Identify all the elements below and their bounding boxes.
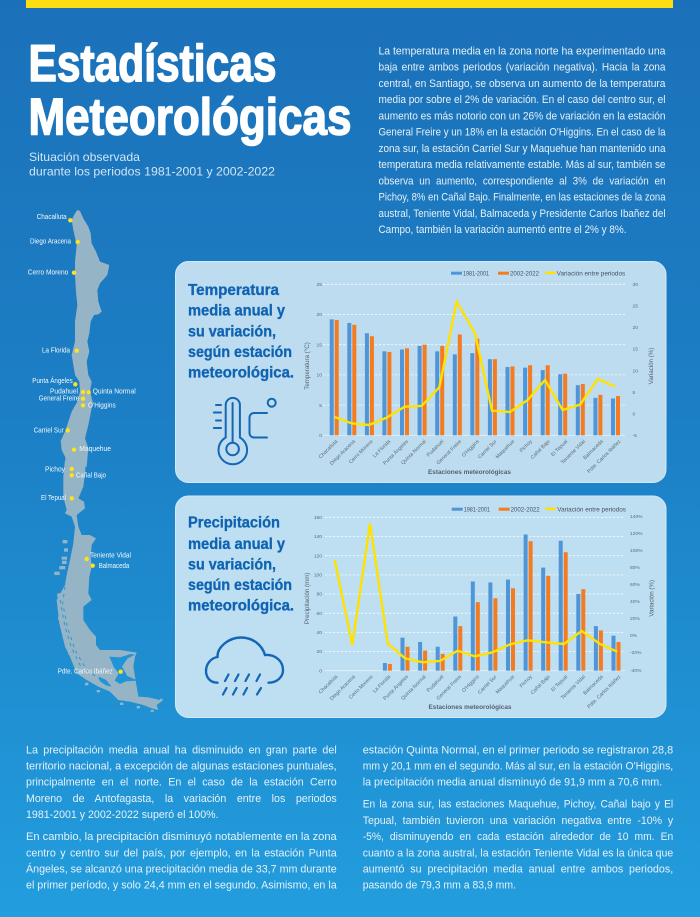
heading: temperature: [188, 282, 294, 381]
heading: precipitation: Precipitación: [188, 515, 280, 532]
bar and line chart: temperature: 5: [319, 403, 322, 409]
text block: precipitation left column: el primer período, y solo 24,4 mm en el segundo. Asimismo, en la: [26, 880, 337, 892]
bar and line chart: precipitation: 160: [314, 515, 322, 521]
bar and line chart: precipitation: Pichoy: [519, 674, 534, 689]
bar and line chart: precipitation: 40%: [630, 599, 640, 605]
text block: precipitation left column: En cambio, la precipitación disminuyó notablemente en la zona: [26, 831, 337, 843]
bar and line chart: temperature: 10: [317, 373, 322, 379]
bar and line chart: temperature: Balmaceda: [582, 439, 605, 461]
text block: precipitation right column: -5%, disminuyendo en cada estación alrededor de 10 mm. En: [363, 831, 673, 843]
text block: temperature summary: observa un aumento, correspondiente al 3% de variación en: [378, 175, 666, 187]
legend: temperature chart: 1981-2001: [463, 271, 490, 277]
heading: temperature: Temperatura: [188, 282, 279, 299]
heading: precipitation: según estación: [188, 577, 292, 594]
legend: precipitation chart: Variación entre periodos: [557, 507, 626, 513]
bar and line chart: temperature: 30: [632, 282, 638, 288]
text block: precipitation left column: 1981-2001 y 2002-2022 superó el 100%.: [26, 809, 218, 821]
text block: temperature summary: austral, Teniente Vidal, Balmaceda y Presidente Carlos Ibañez del: [378, 208, 666, 220]
map of Chile with stations: Maquehue: [79, 444, 111, 453]
text block: precipitation left column: centro y centro sur del país, por ejemplo, en la estación Punta: [26, 847, 337, 859]
bar and line chart: precipitation: Precipitación (mm): [304, 573, 311, 624]
icon: thermometer: [214, 398, 276, 464]
text block: temperature summary: La temperatura media en la zona norte ha experimentado una: [378, 45, 666, 57]
bar and line chart: temperature: General Freire: [436, 439, 463, 466]
map of Chile with stations: Cerro Moreno: [28, 267, 68, 276]
bar and line chart: temperature: 0: [319, 433, 322, 439]
map of Chile with stations: General Freire: [39, 394, 79, 403]
text block: precipitation right column: [363, 744, 674, 892]
text block: temperature summary: temperatura media relativamente estable. Más al sur, también se: [378, 159, 666, 171]
bar and line chart: precipitation: General Freire: [436, 674, 463, 702]
map of Chile with stations: Pudahuel: [50, 386, 78, 396]
text block: precipitation left column: territorio nacional, a excepción de algunas estaciones puntuales,: [26, 760, 337, 772]
map of Chile with stations: Teniente Vidal: [90, 550, 131, 560]
bar and line chart: precipitation: 0%: [630, 633, 638, 639]
text block: temperature summary: [378, 45, 666, 236]
heading: precipitation: [188, 515, 294, 615]
bar and line chart: temperature: Estaciones meteorológicas: [428, 469, 512, 476]
bar and line chart: precipitation: La Florida: [372, 674, 392, 694]
heading: temperature: su variación,: [188, 324, 276, 340]
bar and line chart: precipitation: Maquehue: [495, 674, 516, 695]
bar and line chart: precipitation: O'Higgins: [461, 674, 481, 694]
bar and line chart: temperature: Quinta Normal: [400, 439, 428, 466]
subtitle: durante los periodos 1981-2001 y 2002-2022: [29, 164, 275, 178]
panel: precipitation: [176, 496, 666, 718]
title: [28, 35, 352, 146]
bar and line chart: precipitation: 60: [317, 611, 322, 617]
heading: precipitation: su variación,: [188, 556, 276, 573]
bar and line chart: temperature: 25: [632, 304, 638, 310]
map of Chile with stations: Pichoy: [45, 465, 65, 474]
bar and line chart: precipitation: -20%: [630, 650, 642, 656]
text block: precipitation right column: Tepual, también tuvieron una variación negativa entre -10% y: [363, 815, 674, 827]
text block: temperature summary: baja entre ambos periodos (variación negativa). Hacia la zona: [378, 62, 666, 74]
bar and line chart: precipitation: 80: [317, 592, 322, 598]
bar and line chart: temperature: Cañal Bajo: [530, 439, 552, 461]
legend: precipitation chart: 2002-2022: [511, 507, 540, 513]
bar and line chart: precipitation: Pudahuel: [426, 674, 445, 694]
map of Chile with stations: Diego Aracena: [30, 237, 72, 246]
bar and line chart: temperature: 0: [632, 411, 636, 417]
subtitle: [29, 150, 275, 178]
map of Chile with stations: [28, 210, 163, 712]
bar and line chart: temperature: Punta Ángeles: [382, 438, 410, 467]
map of Chile with stations: El Tepual: [41, 493, 66, 502]
bar and line chart: precipitation: [304, 507, 656, 711]
heading: precipitation: media anual y: [188, 536, 285, 553]
bar and line chart: temperature: Temperatura (°C): [304, 342, 311, 390]
heading: precipitation: meteorológica.: [188, 598, 294, 615]
heading: temperature: meteorológica.: [188, 364, 294, 381]
text block: precipitation left column: Moreno de Antofagasta, la variación entre los periodos: [26, 793, 337, 805]
map of Chile with stations: Pdte. Carlos Ibáñez: [58, 666, 113, 676]
legend: precipitation chart: 1981-2001: [464, 507, 491, 513]
bar and line chart: precipitation: 80%: [630, 565, 640, 571]
heading: temperature: media anual y: [188, 303, 285, 320]
bar and line chart: precipitation: Punta Ángeles: [382, 673, 410, 702]
text block: precipitation right column: mm y 20,1 mm en el segundo. Más al sur, en la estación O'Higgins,: [363, 760, 673, 772]
bar and line chart: temperature: 5: [632, 390, 636, 396]
bar and line chart: precipitation: Pdte. Carlos Ibáñez: [586, 674, 623, 710]
map of Chile with stations: Chacalluta: [37, 212, 67, 221]
bar and line chart: temperature: 15: [632, 347, 638, 353]
icon: rain cloud: [206, 638, 283, 694]
subtitle: Situación observada: [29, 150, 140, 164]
bar and line chart: precipitation: -40%: [630, 668, 642, 674]
bar and line chart: precipitation: 20: [317, 649, 322, 655]
bar and line chart: temperature: Pudahuel: [426, 439, 445, 458]
bar and line chart: precipitation: Teniente Vidal: [560, 674, 587, 701]
bar and line chart: precipitation: Cerro Moreno: [348, 674, 375, 701]
text block: temperature summary: aumento es más notorio con un 26% de variación en la estación: [378, 110, 666, 122]
bar and line chart: temperature: Variación (%): [648, 348, 655, 384]
legend: temperature chart: [451, 271, 625, 277]
text block: temperature summary: media por sobre el 2% de variación. En el caso del centro sur, el: [378, 94, 666, 106]
bar and line chart: precipitation: 0: [319, 668, 322, 674]
bar and line chart: precipitation: Estaciones meteorológicas: [428, 704, 512, 711]
bar and line chart: temperature: El Tepual: [550, 439, 569, 458]
bar and line chart: precipitation: 20%: [630, 616, 640, 622]
top yellow bar: [26, 0, 673, 8]
text block: precipitation right column: la precipitación media anual disminuyó de 91,9 mm a 70,6 mm.: [363, 777, 662, 789]
legend: temperature chart: 2002-2022: [510, 271, 540, 277]
map of Chile with stations: La Florida: [42, 346, 71, 355]
bar and line chart: temperature: Teniente Vidal: [560, 439, 587, 466]
text block: precipitation right column: pasando de 79,3 mm a 83,9 mm.: [363, 880, 516, 892]
map of Chile with stations: Quinta Normal: [93, 386, 136, 396]
bar and line chart: temperature: Pdte. Carlos Ibáñez: [586, 439, 623, 475]
bar and line chart: precipitation: 140: [314, 534, 322, 540]
bar and line chart: precipitation: Variación (%): [648, 580, 656, 617]
text block: temperature summary: zona sur, la estación Carriel Sur y Maquehue han mantenido una: [378, 143, 666, 155]
bar and line chart: temperature: Carriel Sur: [477, 439, 499, 460]
text block: precipitation left column: [26, 744, 337, 892]
panel: temperature: [176, 262, 666, 482]
bar and line chart: temperature: O'Higgins: [461, 439, 481, 459]
bar and line chart: precipitation: 100%: [630, 548, 643, 554]
bar and line chart: precipitation: 120: [314, 553, 322, 559]
map of Chile with stations: Cañal Bajo: [76, 470, 106, 480]
text block: precipitation right column: estación Quinta Normal, en el primer periodo se registraron 28,8: [363, 744, 673, 756]
title: Estadísticas: [28, 35, 276, 93]
map of Chile with stations: Punta Ángeles: [32, 376, 73, 385]
text block: precipitation left column: principalmente en el norte. En el caso de la estación Cerro: [26, 777, 337, 789]
bar and line chart: temperature: Maquehue: [495, 439, 516, 460]
bar and line chart: temperature: [304, 271, 655, 476]
text block: precipitation right column: En la zona sur, las estaciones Maquehue, Pichoy, Cañal bajo y El: [363, 799, 673, 811]
bar and line chart: precipitation: El Tepual: [550, 674, 569, 693]
legend: temperature chart: Variación entre periodos: [557, 271, 625, 277]
bar and line chart: precipitation: Balmaceda: [582, 674, 605, 696]
text block: temperature summary: central, en Santiago, se observa un aumento de la temperatura: [378, 78, 666, 90]
legend: precipitation chart: [452, 507, 626, 513]
bar and line chart: precipitation: 60%: [630, 582, 640, 588]
bar and line chart: precipitation: Quinta Normal: [400, 674, 428, 702]
map of Chile with stations: Balmaceda: [99, 561, 130, 570]
bar and line chart: precipitation: 40: [317, 630, 322, 636]
bar and line chart: precipitation: 100: [314, 573, 322, 579]
text block: precipitation left column: Ángeles, se alcanzó una precipitación media de 33,7 mm durante: [26, 862, 337, 876]
bar and line chart: precipitation: 140%: [630, 514, 643, 520]
bar and line chart: precipitation: Chacalluta: [318, 674, 339, 695]
bar and line chart: temperature: 10: [632, 368, 638, 374]
text block: temperature summary: General Freire y un 18% en la estación O'Higgins. En el caso de la: [378, 126, 666, 138]
text block: precipitation right column: aumentó su precipitación media anual entre ambos periodos,: [363, 864, 673, 876]
text block: temperature summary: Campo, también la variación aumentó entre el 2% y 8%.: [378, 224, 626, 236]
bar and line chart: precipitation: 120%: [630, 531, 643, 537]
text block: precipitation left column: La precipitación media anual ha disminuido en gran parte del: [26, 744, 337, 756]
text block: precipitation right column: cuanto a la zona austral, la estación Teniente Vidal es la única que: [363, 847, 673, 859]
title: Meteorológicas: [28, 88, 352, 146]
bar and line chart: temperature: Chacalluta: [318, 439, 339, 460]
bar and line chart: temperature: Cerro Moreno: [348, 439, 375, 465]
map of Chile with stations: Carriel Sur: [34, 426, 64, 434]
bar and line chart: temperature: 25: [317, 282, 322, 288]
bar and line chart: temperature: La Florida: [372, 439, 392, 459]
bar and line chart: temperature: Pichoy: [519, 439, 534, 454]
bar and line chart: precipitation: Carriel Sur: [477, 674, 499, 696]
bar and line chart: temperature: 20: [317, 312, 322, 318]
bar and line chart: temperature: Diego Aracena: [329, 439, 357, 467]
bar and line chart: precipitation: Diego Aracena: [329, 674, 357, 702]
bar and line chart: temperature: 20: [632, 325, 638, 331]
bar and line chart: temperature: 15: [317, 342, 322, 348]
heading: temperature: según estación: [188, 344, 292, 361]
bar and line chart: temperature: -5: [632, 433, 637, 439]
bar and line chart: precipitation: Cañal Bajo: [530, 674, 552, 696]
map of Chile with stations: O'Higgins: [88, 400, 116, 410]
